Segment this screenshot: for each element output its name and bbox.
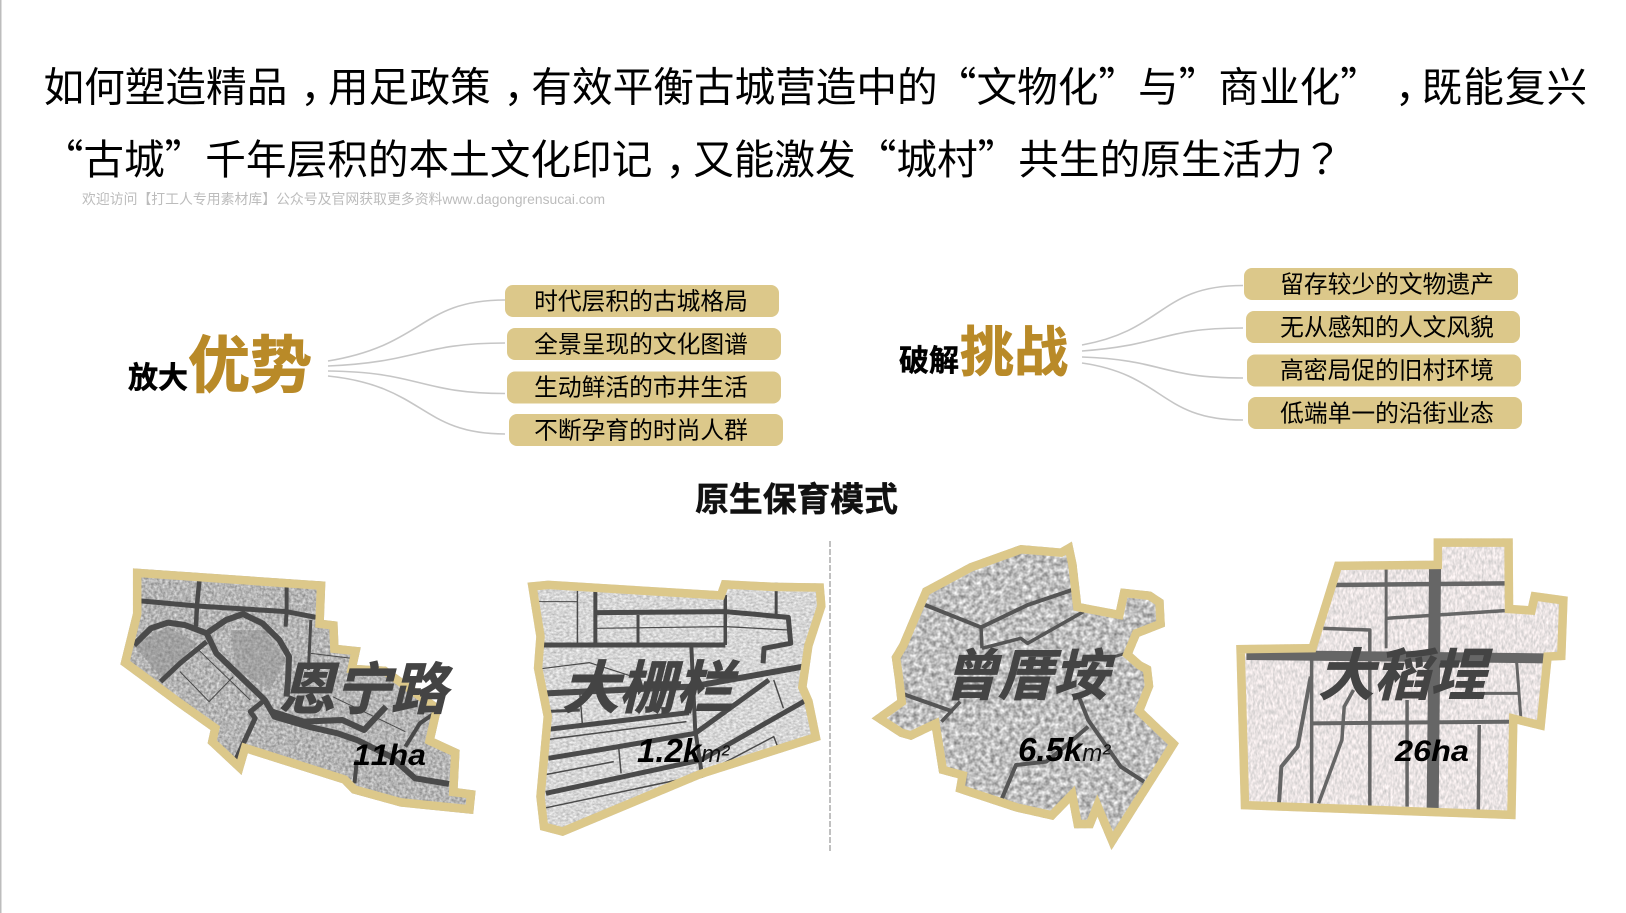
title: question heading: 有效平衡古城营造中的 bbox=[531, 55, 938, 114]
heading: 破解挑战: 破解 bbox=[899, 336, 959, 380]
connector curves: advantages bbox=[328, 300, 505, 434]
pill: 无从感知的人文风貌: 无从感知的人文风貌 bbox=[1280, 308, 1494, 342]
pill: 低端单一的沿街业态: 低端单一的沿街业态 bbox=[1280, 394, 1494, 428]
pill: 时代层积的古城格局: 时代层积的古城格局 bbox=[534, 282, 748, 316]
label: 大栅栏: 大栅栏 bbox=[562, 643, 740, 725]
title: question heading: 古城 bbox=[83, 127, 165, 186]
heading: 原生保育模式: 原生保育模式 bbox=[695, 472, 898, 521]
label: 曾厝垵: 曾厝垵 bbox=[943, 631, 1116, 711]
label: 大稻埕: 大稻埕 bbox=[1318, 631, 1493, 712]
heading: 破解挑战: 挑战 bbox=[960, 308, 1068, 387]
title: question heading: 既能复兴 bbox=[1422, 55, 1588, 114]
title: question heading: ？ bbox=[1302, 127, 1343, 186]
title: question heading: 共生的原生活力 bbox=[1018, 127, 1303, 186]
heading: 放大优势: 放大 bbox=[128, 353, 188, 397]
title: question heading: “ bbox=[856, 127, 896, 186]
panel: break challenges bbox=[899, 264, 1522, 429]
heading: 破解挑战 bbox=[899, 308, 1068, 387]
title: question heading: “ bbox=[43, 127, 83, 186]
watermark note: 欢迎访问【打工人专用素材库】公众号及官网获取更多资料www.dagongrensucai.com bbox=[82, 191, 605, 207]
pill: 生动鲜活的市井生活: 生动鲜活的市井生活 bbox=[534, 368, 748, 402]
label: 1.2km²: 1.2km² bbox=[637, 732, 730, 769]
heading: 放大优势: 优势 bbox=[188, 315, 312, 405]
title: question heading: 与 bbox=[1138, 55, 1179, 114]
title: question heading: ， bbox=[1395, 55, 1436, 114]
label: 恩宁路: 恩宁路 bbox=[279, 645, 453, 726]
heading: 放大优势 bbox=[128, 315, 312, 405]
title: question heading: ” bbox=[978, 127, 1018, 186]
pill: 高密局促的旧村环境: 高密局促的旧村环境 bbox=[1280, 350, 1494, 386]
title: question heading: 商业化 bbox=[1218, 55, 1340, 114]
map: 曾厝垵 bbox=[870, 540, 1190, 860]
title: question heading: 又能激发 bbox=[693, 127, 856, 186]
title: question heading: ， bbox=[666, 127, 706, 186]
title: question heading: 千年层积的本土文化印记 bbox=[205, 127, 652, 186]
title: question heading: 文物化 bbox=[976, 55, 1098, 114]
pill: 留存较少的文物遗产: 留存较少的文物遗产 bbox=[1280, 264, 1494, 300]
map: 大栅栏 bbox=[528, 580, 826, 836]
title: question heading: ， bbox=[300, 55, 341, 114]
title: question heading: ” bbox=[165, 127, 205, 186]
title: question heading bbox=[43, 55, 1588, 186]
title: question heading: ， bbox=[504, 55, 544, 114]
title: question heading: ” bbox=[1098, 55, 1139, 114]
title: question heading: 如何塑造精品 bbox=[44, 55, 287, 114]
page edge line bbox=[0, 0, 2, 913]
map: 大稻埕 bbox=[1236, 538, 1568, 820]
title: question heading: ” bbox=[1179, 55, 1219, 114]
pill: 不断孕育的时尚人群: 不断孕育的时尚人群 bbox=[534, 410, 748, 446]
label: 6.5km²: 6.5km² bbox=[1018, 731, 1111, 768]
title: question heading: “ bbox=[936, 55, 976, 114]
label: 26ha: 26ha bbox=[1394, 735, 1469, 768]
title: question heading: 用足政策 bbox=[328, 55, 491, 114]
connector curves: challenges bbox=[1082, 286, 1243, 420]
title: question heading: 城村 bbox=[896, 127, 978, 186]
dashed divider bbox=[829, 541, 831, 851]
panel: amplify advantages bbox=[128, 282, 783, 446]
map: 恩宁路 bbox=[120, 568, 476, 814]
title: question heading: ” bbox=[1340, 55, 1381, 114]
label: 11ha: 11ha bbox=[353, 739, 426, 772]
pill: 全景呈现的文化图谱: 全景呈现的文化图谱 bbox=[534, 324, 748, 360]
